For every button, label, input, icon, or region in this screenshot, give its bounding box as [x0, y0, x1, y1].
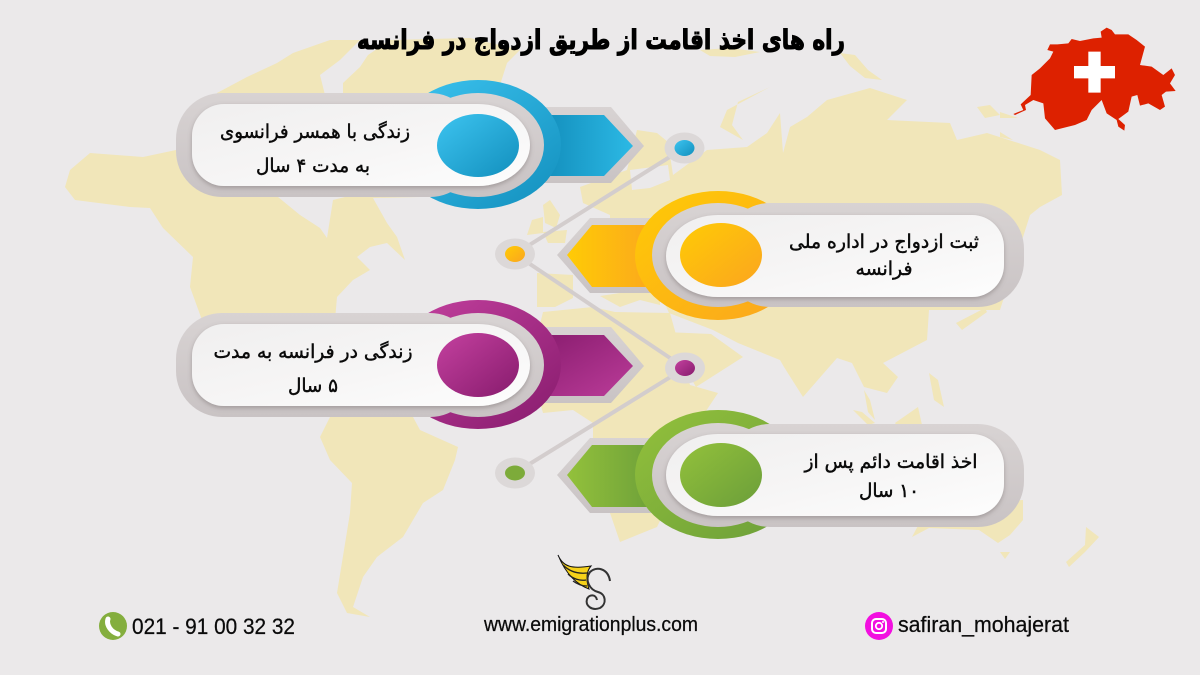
hudson bay and baltic cutouts [278, 165, 670, 238]
arrow: magenta hexagon [530, 327, 644, 403]
gray ring [412, 93, 544, 197]
gray backing pill [724, 203, 1024, 307]
icon: phone [99, 612, 127, 640]
website: www.emigrationplus.com [483, 614, 698, 636]
phone number: 021 - 91 00 32 32 [132, 614, 295, 639]
arrow: yellow hexagon [557, 218, 660, 293]
gray ring [652, 423, 784, 527]
node: blue [664, 132, 704, 164]
text: magenta step: زندگی در فرانسه به مدت [214, 340, 412, 363]
gray ring [412, 313, 544, 417]
text: yellow step: ثبت ازدواج در اداره ملی [789, 231, 979, 253]
text: yellow step [789, 231, 979, 280]
blue disc [437, 114, 519, 177]
icon: switzerland map with flag cross [1013, 28, 1176, 131]
text: green step [804, 451, 978, 502]
gray backing pill [724, 424, 1024, 527]
white pill [666, 434, 1004, 516]
green ring [635, 410, 801, 539]
blue ring [395, 80, 561, 209]
text: green step: ۱۰ سال [859, 480, 919, 502]
magenta disc [437, 333, 519, 397]
text: magenta step: ۵ سال [288, 375, 338, 397]
logo: winged S [558, 555, 610, 609]
gray backing pill [176, 313, 476, 417]
panel: green step [557, 410, 1024, 539]
arrow: green hexagon [557, 438, 660, 513]
text: blue step: به مدت ۴ سال [256, 155, 370, 177]
magenta ring [395, 300, 561, 429]
yellow disc [680, 223, 762, 287]
instagram handle: safiran_mohajerat [898, 612, 1069, 637]
panel: yellow step [557, 191, 1024, 320]
green disc [680, 443, 762, 507]
white pill [192, 104, 530, 186]
icon: instagram [865, 612, 893, 640]
panel: blue step [176, 80, 644, 209]
node: yellow [495, 238, 535, 270]
white pill [666, 215, 1004, 297]
text: blue step: زندگی با همسر فرانسوی [220, 120, 410, 143]
text: magenta step [214, 340, 412, 397]
connector lines [515, 148, 685, 473]
text: blue step [220, 120, 410, 177]
gray backing pill [176, 93, 476, 197]
panel: magenta step [176, 300, 644, 429]
gray ring [652, 203, 784, 307]
text: yellow step: فرانسه [856, 258, 912, 280]
node: green [495, 458, 535, 488]
title: راه های اخذ اقامت از طریق ازدواج در فرانسه [357, 25, 845, 56]
yellow ring [635, 191, 801, 320]
node: magenta [665, 352, 705, 384]
white pill [192, 324, 530, 406]
world map [65, 38, 1099, 617]
arrow: blue hexagon [530, 107, 644, 183]
text: green step: اخذ اقامت دائم پس از [804, 451, 978, 473]
